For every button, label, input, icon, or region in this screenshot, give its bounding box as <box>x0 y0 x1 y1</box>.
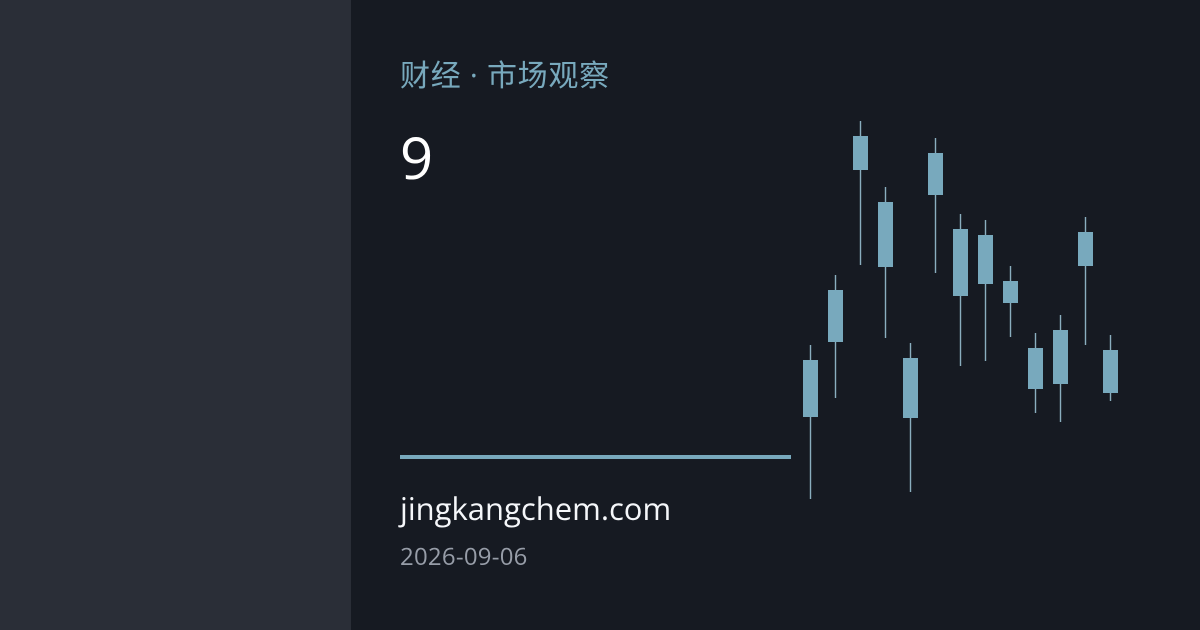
title number: 9 <box>400 117 433 196</box>
publication date: 2026-09-06 <box>400 540 528 573</box>
site domain: jingkangchem.com <box>400 488 671 530</box>
category heading: 财经 · 市场观察 <box>400 54 610 95</box>
left side panel <box>0 0 351 630</box>
accent divider <box>400 455 791 459</box>
